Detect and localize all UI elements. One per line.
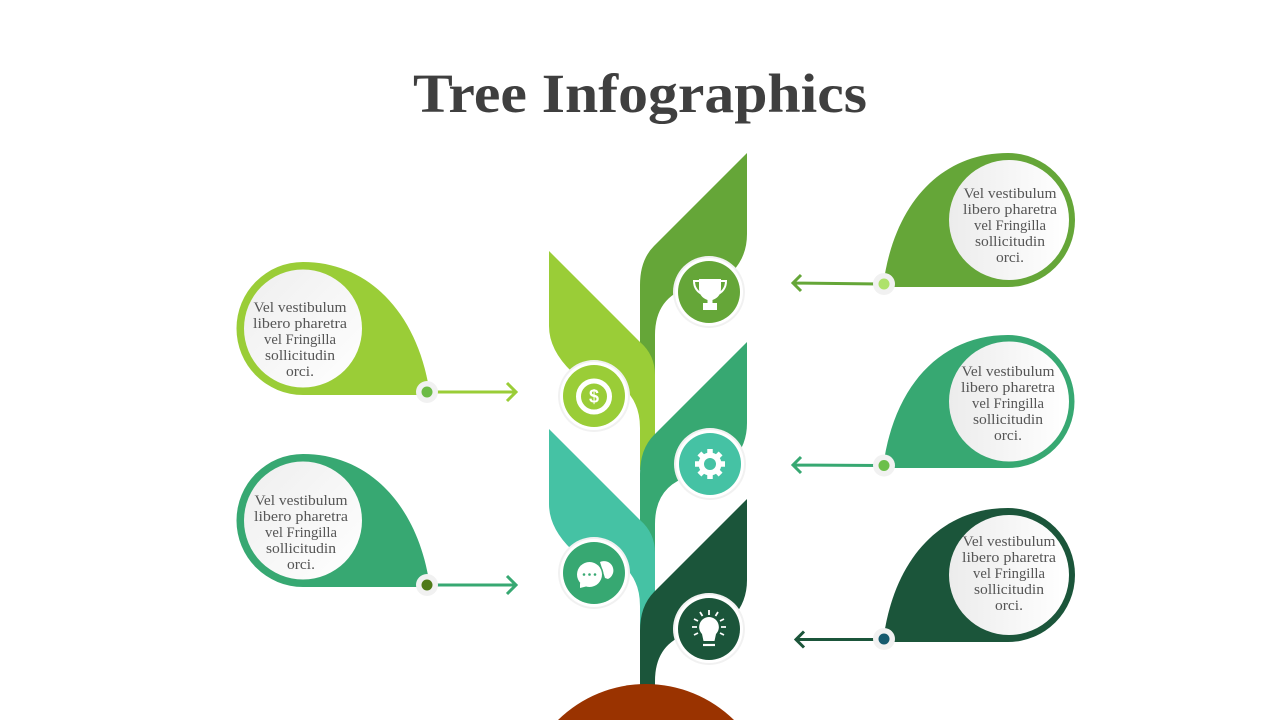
callout text: sollicitudin [266, 541, 337, 557]
arrow: right 2 [793, 454, 895, 476]
arrow: left 2 [416, 574, 516, 596]
soil mound [558, 684, 734, 720]
callout text: Vel vestibulum [254, 300, 347, 316]
callout text: vel Fringilla [264, 332, 337, 348]
callout text: vel Fringilla [974, 218, 1047, 234]
tree [549, 153, 747, 720]
callout text: vel Fringilla [972, 396, 1045, 412]
icon: gear [674, 428, 746, 500]
callout text: sollicitudin [973, 412, 1044, 428]
callout text: Vel vestibulum [962, 534, 1056, 550]
icon: trophy [673, 256, 745, 328]
callout text [961, 364, 1056, 444]
callout: right 1 [883, 153, 1075, 287]
title: Tree Infographics [413, 63, 867, 124]
callout text: sollicitudin [974, 582, 1045, 598]
icon: dollar coin: $ [589, 386, 599, 406]
callout text: sollicitudin [265, 348, 336, 364]
callout text: orci. [994, 428, 1022, 444]
callout text: Vel vestibulum [964, 186, 1057, 202]
callout: right 2 [883, 335, 1074, 468]
leaf: middle right [640, 342, 747, 581]
callout text: sollicitudin [975, 234, 1046, 250]
icon: dollar coin [558, 360, 630, 432]
leaf: top right [640, 153, 747, 392]
callout text: orci. [996, 250, 1024, 266]
callout text [253, 300, 348, 380]
callout text: orci. [287, 557, 315, 573]
callout text: Vel vestibulum [254, 493, 348, 509]
callout text: libero pharetra [253, 316, 348, 332]
callout text: libero pharetra [962, 550, 1057, 566]
callout text [962, 534, 1057, 614]
callout text: libero pharetra [254, 509, 349, 525]
callout text: vel Fringilla [265, 525, 338, 541]
leaf: lower left [549, 429, 655, 640]
callout text: Vel vestibulum [962, 364, 1055, 380]
leaf: upper left [549, 251, 655, 470]
callout: right 3 [883, 508, 1075, 642]
callout text: libero pharetra [961, 380, 1056, 396]
arrow: left 1 [416, 381, 516, 403]
icon: chat bubbles [558, 537, 630, 609]
callout: left 1 [237, 262, 430, 395]
arrow: right 1 [793, 273, 895, 295]
callout text [254, 493, 349, 573]
callout text: orci. [286, 364, 314, 380]
callout text: vel Fringilla [973, 566, 1046, 582]
callout text: libero pharetra [963, 202, 1058, 218]
icon: light bulb [673, 593, 745, 665]
callout text: orci. [995, 598, 1023, 614]
callout text [963, 186, 1058, 266]
callout: left 2 [237, 454, 430, 587]
leaf: bottom right [640, 499, 747, 695]
arrow: right 3 [796, 628, 895, 650]
